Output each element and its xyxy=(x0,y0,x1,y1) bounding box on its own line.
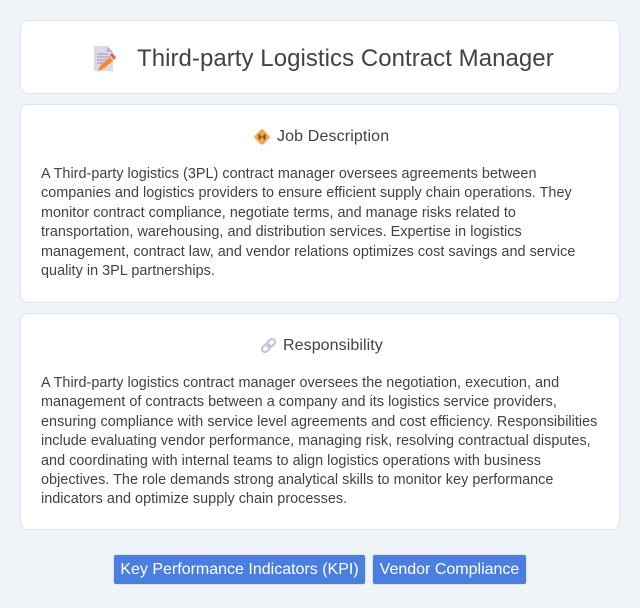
heading: responsibility: Responsibility xyxy=(283,337,383,354)
text block: responsibility: indicators and optimize supply chain processes. xyxy=(41,491,347,507)
text block: job description: A Third-party logistics (3PL) contract manager oversees agreements between xyxy=(41,166,536,182)
icon: document with pencil xyxy=(94,46,116,71)
text block: job description: management, contract law, and vendor relations optimizes cost savings and service xyxy=(41,244,575,260)
text block: responsibility: A Third-party logistics contract manager oversees the negotiation, execution, and xyxy=(41,375,559,391)
panel: job description xyxy=(20,104,620,303)
text block: responsibility: ensuring compliance with service level agreements and cost efficiency. Responsibilities xyxy=(41,414,597,430)
text block: responsibility: management of contracts between a company and its logistics service providers, xyxy=(41,394,557,410)
text block: job description xyxy=(41,166,575,279)
text block: job description: companies and logistics providers to ensure efficient supply chain operations. They xyxy=(41,185,572,201)
text block: job description: monitor contract compliance, negotiate terms, and manage risks related to xyxy=(41,205,516,221)
text block: job description: transportation, warehousing, and distribution services. Expertise in logistics xyxy=(41,224,522,240)
text block: responsibility: and coordinating with internal teams to align logistics operations with business xyxy=(41,453,541,469)
heading: job description: Job Description xyxy=(277,128,389,145)
text block: job description: quality in 3PL partnerships. xyxy=(41,263,215,279)
text block: responsibility xyxy=(41,375,597,507)
panel: responsibility xyxy=(20,313,620,530)
icon: orange diamond xyxy=(254,129,270,145)
icon: chain link xyxy=(260,338,276,354)
panel: title header xyxy=(20,20,620,94)
button: KPI tag xyxy=(113,554,366,585)
title: Third-party Logistics Contract Manager xyxy=(137,45,554,72)
button: KPI tag: Key Performance Indicators (KPI) xyxy=(120,561,359,578)
button: vendor compliance tag xyxy=(372,554,527,585)
button: vendor compliance tag: Vendor Compliance xyxy=(380,561,519,578)
text block: responsibility: objectives. The role demands strong analytical skills to monitor key performance xyxy=(41,472,553,488)
text block: responsibility: include evaluating vendor performance, managing risk, resolving contractual disputes, xyxy=(41,433,591,449)
